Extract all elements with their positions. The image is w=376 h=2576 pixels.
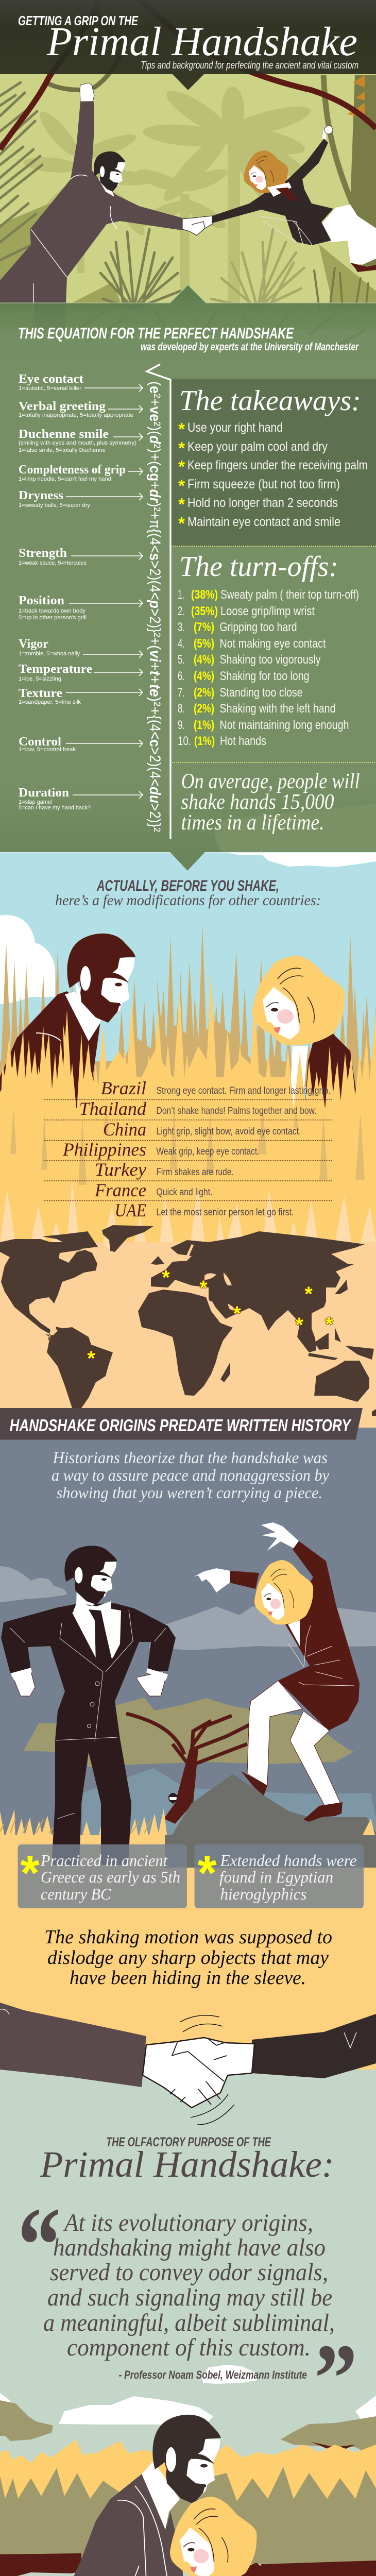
table: handshake rules by country: Quick and light. <box>157 1187 212 1198</box>
text: historians theorize: showing that you weren’t carrying a piece. <box>57 1483 322 1502</box>
illustration: vines <box>0 0 376 149</box>
map: country markers <box>87 1266 333 1370</box>
text: shaking motion: The shaking motion was supposed to <box>44 1926 332 1948</box>
illustration: field and shore <box>0 2439 376 2576</box>
equation labels with arrows: 1=ice, 5=sizzling <box>19 676 61 682</box>
list: turn-offs: Shaking too vigorously <box>219 653 320 667</box>
kicker: GETTING A GRIP ON THE <box>18 13 138 28</box>
list: turn-offs: (4%) <box>194 669 214 683</box>
illustration: grass <box>0 1808 376 1839</box>
illustration: small man under tree <box>168 1793 178 1804</box>
illustration: man head <box>94 151 125 192</box>
closing quote mark: ” <box>314 2325 357 2433</box>
illustration: rock base <box>165 1835 376 1868</box>
pull quote: At its evolutionary origins, <box>63 2209 313 2236</box>
map: country markers: * <box>325 1313 333 1336</box>
panel: origins <box>0 1408 376 1868</box>
equation labels with arrows: Temperature <box>19 663 92 676</box>
list: takeaways: Hold no longer than 2 seconds <box>187 496 338 510</box>
map: country markers: * <box>162 1266 170 1289</box>
list: turn-offs: 5. <box>178 653 185 667</box>
list: turn-offs: (38%) <box>191 588 218 602</box>
illustration: clasped hands <box>182 216 212 235</box>
equation labels with arrows: Strength <box>19 547 67 560</box>
table: handshake rules by country: Firm shakes are rude. <box>157 1167 234 1178</box>
text: shaking motion <box>44 1926 332 1989</box>
list: turn-offs: (2%) <box>194 686 214 700</box>
panel: handshake equation <box>0 285 376 871</box>
list: takeaways: Use your right hand <box>187 420 283 435</box>
table: handshake rules by country: Weak grip, keep eye contact. <box>157 1146 260 1157</box>
equation labels with arrows: Vigor <box>19 637 48 651</box>
list: turn-offs: Shaking for too long <box>219 669 309 683</box>
list: turn-offs: (7%) <box>194 620 214 634</box>
text: historians theorize: a way to assure peace and nonaggression by <box>52 1466 330 1484</box>
illustration: man in wheat <box>0 934 135 1121</box>
illustration: savanna backdrop <box>0 1566 376 1868</box>
heading: the takeaways: The takeaways: <box>179 385 361 417</box>
list: takeaways: * <box>178 495 185 514</box>
illustration: woman attacking <box>194 1522 360 1822</box>
equation: vertical formula <box>146 381 163 832</box>
list: turn-offs: 2. <box>178 604 185 618</box>
table: handshake rules by country: UAE <box>115 1200 146 1221</box>
list: turn-offs: 4. <box>178 637 185 651</box>
banner heading <box>0 1408 363 1439</box>
equation labels with arrows: 1=low, 5=control freak <box>19 747 76 753</box>
panel: world map <box>0 1225 376 1430</box>
list: turn-offs: (4%) <box>194 653 214 667</box>
illustration: clouds and trees <box>0 2365 376 2468</box>
list: turn-offs: Not maintaining long enough <box>219 718 349 732</box>
panel: olfactory purpose <box>0 2003 376 2576</box>
equation labels with arrows: Completeness of grip <box>19 463 126 477</box>
equation: vertical formula: (4<s>2)(4<p>2)}²+ <box>146 533 163 645</box>
list: takeaways: * <box>178 514 185 533</box>
list: turn-offs: (2%) <box>194 702 214 716</box>
pull quote: and such signaling may still be <box>47 2284 332 2311</box>
equation labels with arrows <box>19 372 143 811</box>
panel: country modifications <box>0 852 376 1247</box>
equation labels with arrows: 1=slap game! <box>19 799 53 805</box>
equation labels with arrows: 1=limp noodle, 5=can’t feel my hand <box>19 476 111 482</box>
list: takeaways: * <box>178 476 185 495</box>
map: continents <box>0 1225 376 1416</box>
list: turn-offs: Standing too close <box>219 686 303 700</box>
illustration: foreground wheat <box>0 973 376 1118</box>
map: country markers: * <box>304 1283 313 1306</box>
list: turn-offs: Shaking with the left hand <box>219 702 336 716</box>
list: turn-offs: Gripping too hard <box>219 620 297 634</box>
equation labels with arrows: Dryness <box>19 489 63 502</box>
equation labels with arrows: 1=autistic, 5=serial killer <box>19 385 81 392</box>
equation labels with arrows: Duration <box>19 786 69 800</box>
list: takeaways: Keep your palm cool and dry <box>187 439 328 454</box>
fact box: Egyptian hieroglyphics: hieroglyphics <box>220 1885 307 1903</box>
illustration: man in suit <box>1 1546 176 1865</box>
callout: 15,000 handshakes: shake hands 15,000 <box>181 790 334 814</box>
equation labels with arrows: Position <box>19 594 64 607</box>
equation labels with arrows: 1=weak sauce, 5=Hercules <box>19 560 87 566</box>
map: country markers: * <box>199 1277 208 1299</box>
list: takeaways: * <box>178 457 185 476</box>
equation labels with arrows: 1=totally inappropriate, 5=totally appropriate <box>19 412 133 418</box>
callout: 15,000 handshakes <box>181 770 360 835</box>
equation: radical sign <box>147 364 170 839</box>
equation labels with arrows: (smiling with eyes and mouth, plus symmetry) <box>19 440 136 446</box>
equation labels with arrows: 1=false smile, 5=totally Duchenne <box>19 447 106 453</box>
table: handshake rules by country: Strong eye contact. Firm and longer lasting grip. <box>157 1086 331 1096</box>
illustration: background wheat <box>0 924 376 1087</box>
heading: THE OLFACTORY PURPOSE OF THE <box>106 2135 271 2149</box>
fact box: Egyptian hieroglyphics: found in Egyptian <box>219 1868 333 1886</box>
pull quote: handshaking might have also <box>53 2234 326 2261</box>
equation labels with arrows: Eye contact <box>19 372 83 386</box>
equation: vertical formula: ( vi + t + te )²+ <box>146 645 163 715</box>
map: pale strands fade <box>31 1243 351 1257</box>
fact box: Egyptian hieroglyphics: Extended hands were <box>220 1851 356 1870</box>
fact box: ancient Greece <box>18 1844 187 1908</box>
table: handshake rules by country: Brazil <box>101 1078 146 1098</box>
map: country markers: * <box>295 1314 303 1336</box>
table: handshake rules by country: Thailand <box>79 1098 147 1119</box>
opening quote mark: “ <box>18 2185 61 2305</box>
illustration: background palm trees <box>23 84 313 309</box>
table: handshake rules by country: Don’t shake hands! Palms together and bow. <box>157 1106 316 1116</box>
list: turn-offs: 8. <box>178 702 185 716</box>
panel: jungle hero <box>0 0 376 330</box>
fact box: ancient Greece: century BC <box>41 1885 111 1903</box>
foliage ghost <box>77 309 366 350</box>
heading: ACTUALLY, BEFORE YOU SHAKE, <box>96 877 279 894</box>
equation labels with arrows: 1=zombie, 5=whoa nelly <box>19 651 80 657</box>
list: turn-offs: 9. <box>178 718 185 732</box>
list: takeaways: * <box>178 438 185 457</box>
panel: title banner <box>0 0 376 90</box>
equation labels with arrows: Duchenne smile <box>19 428 109 441</box>
list: turn-offs: 1. <box>178 588 184 602</box>
equation labels with arrows: Texture <box>19 687 62 700</box>
table: handshake rules by country: Turkey <box>95 1159 146 1180</box>
title: Primal Handshake <box>46 20 357 64</box>
fact box: ancient Greece: Greece as early as 5th <box>41 1868 180 1886</box>
fact box: Egyptian hieroglyphics <box>195 1844 364 1908</box>
heading: the turn-offs: The turn-offs: <box>179 551 338 583</box>
illustration: man sniffing <box>60 2415 221 2576</box>
list: turn-offs: 7. <box>178 686 185 700</box>
pull quote: a meaningful, albeit subliminal, <box>43 2309 335 2336</box>
list: turn-offs: Loose grip/limp wrist <box>220 604 315 618</box>
text: historians theorize: Historians theorize that the handshake was <box>53 1448 328 1467</box>
pull quote <box>43 2209 335 2361</box>
illustration: handshake close-up <box>0 2003 376 2125</box>
map: country markers: * <box>233 1302 241 1325</box>
table: handshake rules by country: China <box>103 1119 146 1140</box>
illustration: wheat strands <box>10 1108 365 1185</box>
illustration: man swinging <box>0 83 182 330</box>
equation labels with arrows: Verbal greeting <box>19 400 106 413</box>
equation: vertical formula: ( cg+dr)²+π{ <box>146 461 163 533</box>
list: turn-offs: (5%) <box>194 637 214 651</box>
list: turn-offs: 3. <box>178 620 185 634</box>
text: historians theorize <box>52 1448 330 1502</box>
list: turn-offs: (35%) <box>191 604 218 618</box>
equation: vertical formula: {(4<c>2)(4<du>2)}² <box>146 715 163 832</box>
equation: vertical formula: ( e ²+ve²)(d ²)+ <box>146 381 163 461</box>
quote attribution: - Professor Noam Sobel, Weizmann Institute <box>118 2368 307 2381</box>
equation labels with arrows: 5=up in other person’s grill <box>19 615 87 621</box>
list: turn-offs: 6. <box>178 669 185 683</box>
pull quote: served to convey odor signals, <box>50 2259 328 2286</box>
title: Primal Handshake: <box>40 2144 334 2185</box>
fact box: ancient Greece: Practiced in ancient <box>40 1851 168 1870</box>
pull quote: component of this custom. <box>67 2334 311 2361</box>
table: handshake rules by country: Light grip, slight bow, avoid eye contact. <box>157 1126 301 1137</box>
list: takeaways: * <box>178 419 185 438</box>
list: turn-offs: 10. <box>178 734 191 748</box>
illustration: woman in wheat <box>252 956 361 1121</box>
illustration: foreground foliage shapes <box>0 202 376 309</box>
callout: 15,000 handshakes: times in a lifetime. <box>181 811 324 835</box>
equation labels with arrows: 5=can I have my hand back? <box>19 805 91 811</box>
subheading: here’s a few modifications for other countries: <box>55 892 321 909</box>
list: takeaways: Maintain eye contact and smile <box>187 515 340 529</box>
panel: grass and facts <box>0 1522 376 2072</box>
list: turn-offs: (1%) <box>194 734 215 748</box>
fact box: Egyptian hieroglyphics: * <box>197 1845 217 1901</box>
illustration: woman swinging <box>212 126 376 272</box>
text: shaking motion: have been hiding in the sleeve. <box>70 1967 306 1989</box>
map: inland seas <box>184 1244 242 1321</box>
list: turn-offs: Not making eye contact <box>219 637 326 651</box>
illustration: woman sniffing <box>170 2497 328 2576</box>
table: handshake rules by country: Philippines <box>62 1139 146 1160</box>
map: country markers: * <box>87 1347 95 1370</box>
takeaways box <box>171 379 376 546</box>
equation labels with arrows: 1=back towards own body <box>19 608 86 614</box>
table: handshake rules by country <box>44 1078 333 1221</box>
table: handshake rules by country: France <box>94 1180 146 1200</box>
equation labels with arrows: 1=sandpaper, 5=fine silk <box>19 699 81 705</box>
list: takeaways <box>178 419 368 533</box>
fact box: ancient Greece: * <box>20 1845 40 1901</box>
list: takeaways: Firm squeeze (but not too firm) <box>187 477 340 492</box>
equation labels with arrows: 1=sweaty balls, 5=super dry <box>19 502 91 509</box>
list: turn-offs <box>178 588 359 748</box>
equation labels with arrows: Control <box>19 735 61 749</box>
list: turn-offs: Hot hands <box>220 734 266 748</box>
list: turn-offs: (1%) <box>194 718 214 732</box>
text: shaking motion: dislodge any sharp objects that may <box>47 1947 329 1969</box>
illustration: clouds <box>0 853 376 1004</box>
table: handshake rules by country: Let the most senior person let go first. <box>157 1207 294 1218</box>
